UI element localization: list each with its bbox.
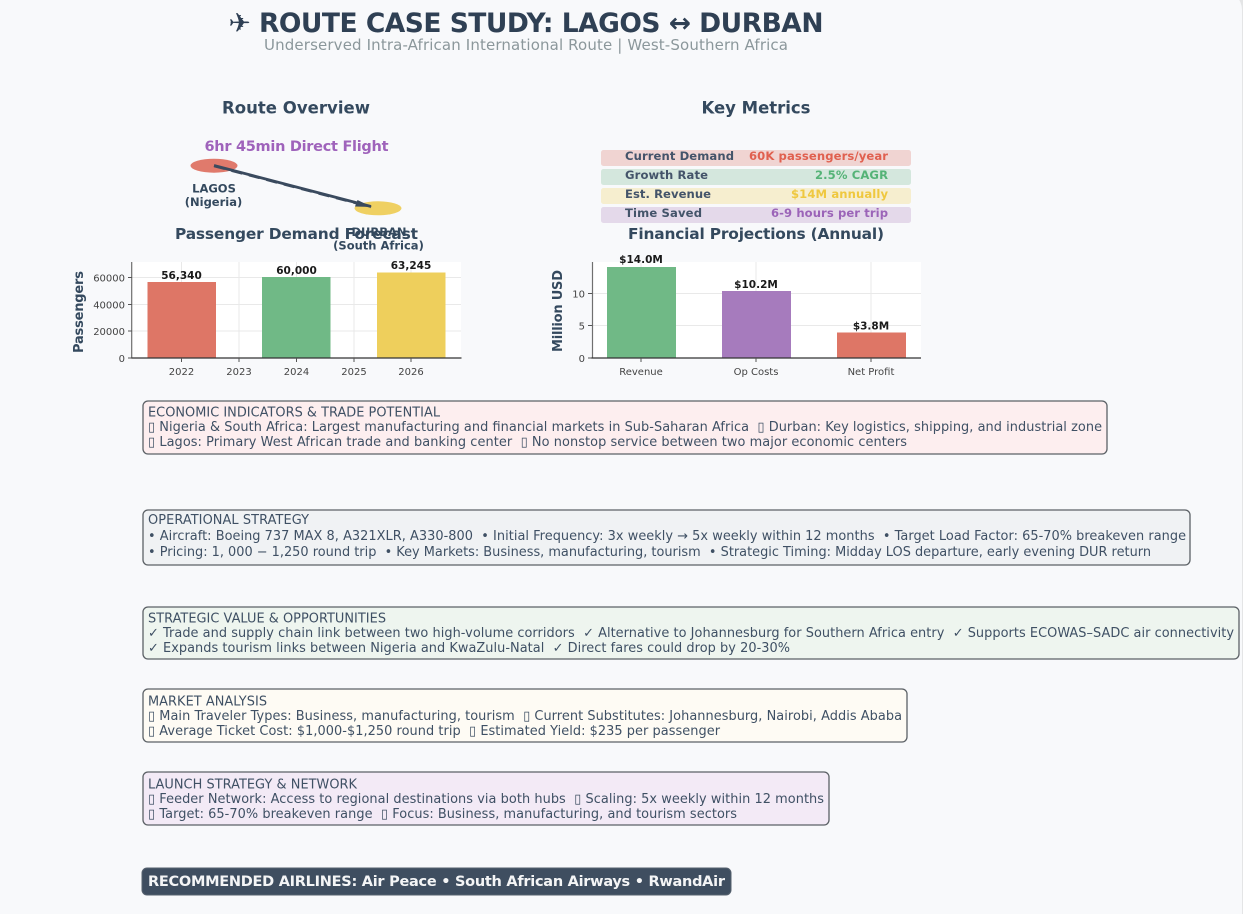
metric: time saved	[601, 206, 911, 223]
chart plot area and grid	[132, 262, 461, 358]
y axis title: Passengers	[72, 271, 87, 353]
panel: key metrics	[601, 98, 911, 223]
heading: launch strategy: LAUNCH STRATEGY & NETWORK	[148, 778, 358, 792]
metric: estimated revenue: Est. Revenue	[625, 187, 711, 201]
y axis tick labels: 0	[119, 354, 125, 365]
label: South Africa: (South Africa)	[333, 238, 424, 252]
heading: passenger demand forecast: Passenger Demand Forecast	[175, 225, 418, 243]
axes	[128, 262, 462, 362]
x axis tick labels: 2025	[341, 367, 367, 378]
y axis tick labels: 10	[572, 290, 585, 300]
bar: operating costs	[722, 291, 791, 358]
value: net profit: $3.8M	[853, 320, 889, 332]
text: launch line 1: ▯ Feeder Network: Access to regional destinations via both hubs ▯ Scaling: 5x weekly within 12 months	[148, 792, 824, 807]
panel: market analysis	[143, 689, 907, 742]
metric: current demand	[601, 149, 911, 166]
heading: route overview: Route Overview	[222, 98, 370, 118]
flight duration label: 6hr 45min Direct Flight	[204, 139, 389, 155]
bar: revenue	[607, 267, 676, 358]
text: strategic line 1: ✓ Trade and supply chain link between two high-volume corridors ✓ Alternative to Johannesburg for Southern Africa entry ✓ Supports ECOWAS–SADC air connectivity	[148, 626, 1234, 641]
x axis tick labels: 2026	[398, 367, 424, 378]
label: Durban: DURBAN	[351, 225, 407, 239]
x axis tick labels: Op Costs	[734, 367, 778, 378]
panel: economic indicators	[143, 401, 1107, 454]
banner: recommended airlines: RECOMMENDED AIRLINES: Air Peace • South African Airways • RwandAir	[148, 874, 726, 890]
heading: strategic value: STRATEGIC VALUE & OPPORTUNITIES	[148, 612, 386, 626]
bar: 2022	[148, 282, 216, 358]
x axis tick labels: Net Profit	[848, 367, 894, 378]
y axis tick labels: 60000	[93, 274, 125, 284]
y axis tick labels: 5	[579, 322, 585, 332]
marker: Durban	[354, 201, 402, 215]
value: 2024: 60,000	[276, 265, 317, 277]
value: 2022: 56,340	[161, 270, 202, 282]
bar: 2024	[262, 277, 330, 358]
text: economic line 2: ▯ Lagos: Primary West African trade and banking center ▯ No nonstop service between two major economic centers	[148, 435, 907, 450]
x axis tick labels: 2022	[169, 367, 194, 378]
x axis tick labels: Revenue	[619, 367, 663, 378]
metric: time saved: 6-9 hours per trip	[771, 206, 888, 220]
y axis tick labels: 0	[579, 354, 585, 365]
value: revenue: $14.0M	[619, 254, 663, 266]
x axis tick labels	[619, 367, 894, 378]
heading: economic indicators: ECONOMIC INDICATORS & TRADE POTENTIAL	[148, 406, 441, 420]
metric: current demand: Current Demand	[625, 149, 734, 163]
text: economic line 1: ▯ Nigeria & South Africa: Largest manufacturing and financial markets in Sub-Saharan Africa ▯ Durban: Key logistics, shipping, and industrial zone	[148, 420, 1102, 435]
y axis tick labels	[572, 290, 585, 365]
text: market line 2: ▯ Average Ticket Cost: $1,000-$1,250 round trip ▯ Estimated Yield: $235 per passenger	[148, 724, 721, 739]
y axis title: Million USD	[551, 270, 566, 352]
y axis tick labels: 20000	[93, 327, 125, 338]
panel: strategic value	[143, 607, 1239, 659]
text: strategic line 2: ✓ Expands tourism links between Nigeria and KwaZulu-Natal ✓ Direct fares could drop by 20-30%	[148, 641, 790, 656]
y axis tick labels	[93, 274, 125, 365]
x axis tick labels: 2023	[226, 367, 252, 378]
panel: operational strategy	[143, 510, 1190, 565]
metric: time saved: Time Saved	[625, 206, 702, 220]
chart plot area and grid	[592, 262, 921, 358]
panel: route overview	[185, 98, 424, 252]
text: launch line 2: ▯ Target: 65-70% breakeven range ▯ Focus: Business, manufacturing, and tourism sectors	[148, 807, 737, 822]
panel: passenger demand forecast chart	[72, 225, 462, 378]
marker: Lagos	[190, 159, 238, 173]
metric: growth rate: 2.5% CAGR	[815, 168, 888, 182]
text: operational line 1: • Aircraft: Boeing 737 MAX 8, A321XLR, A330-800 • Initial Frequency: 3x weekly → 5x weekly within 12 months • Target Load Factor: 65-70% breakeven range	[148, 529, 1186, 544]
metric: current demand: 60K passengers/year	[749, 149, 888, 163]
panel: financial projections chart	[551, 225, 921, 378]
axes	[588, 262, 921, 362]
bar: net profit	[837, 332, 906, 358]
banner: recommended airlines	[142, 868, 731, 895]
metric: growth rate: Growth Rate	[625, 168, 708, 182]
value: 2026: 63,245	[391, 260, 431, 272]
subtitle: Underserved Intra-African International Route | West-Southern Africa	[264, 36, 788, 54]
metric: growth rate	[601, 168, 911, 185]
arrow: Lagos to Durban	[214, 166, 372, 208]
title: ✈ ROUTE CASE STUDY: LAGOS ↔ DURBAN	[228, 8, 824, 39]
heading: key metrics: Key Metrics	[702, 98, 811, 118]
text: market line 1: ▯ Main Traveler Types: Business, manufacturing, tourism ▯ Current Substitutes: Johannesburg, Nairobi, Addis Ababa	[148, 709, 902, 724]
value: operating costs: $10.2M	[734, 279, 778, 291]
x axis tick labels	[169, 367, 424, 378]
text: operational line 2: • Pricing: 1, 000 − 1,250 round trip • Key Markets: Business, manufacturing, tourism • Strategic Timing: Midday LOS departure, early evening DUR return	[148, 545, 1151, 560]
bar: 2026	[377, 272, 446, 358]
heading: market analysis: MARKET ANALYSIS	[148, 694, 267, 710]
heading: financial projections: Financial Projections (Annual)	[628, 225, 884, 243]
x axis tick labels: 2024	[284, 367, 309, 378]
panel: launch strategy	[143, 772, 829, 825]
y axis tick labels: 40000	[93, 300, 125, 312]
metric: estimated revenue	[601, 187, 911, 204]
heading: operational strategy: OPERATIONAL STRATEGY	[148, 513, 309, 528]
label: Nigeria: (Nigeria)	[185, 195, 242, 209]
metric: estimated revenue: $14M annually	[791, 187, 888, 201]
label: Lagos: LAGOS	[192, 182, 236, 196]
